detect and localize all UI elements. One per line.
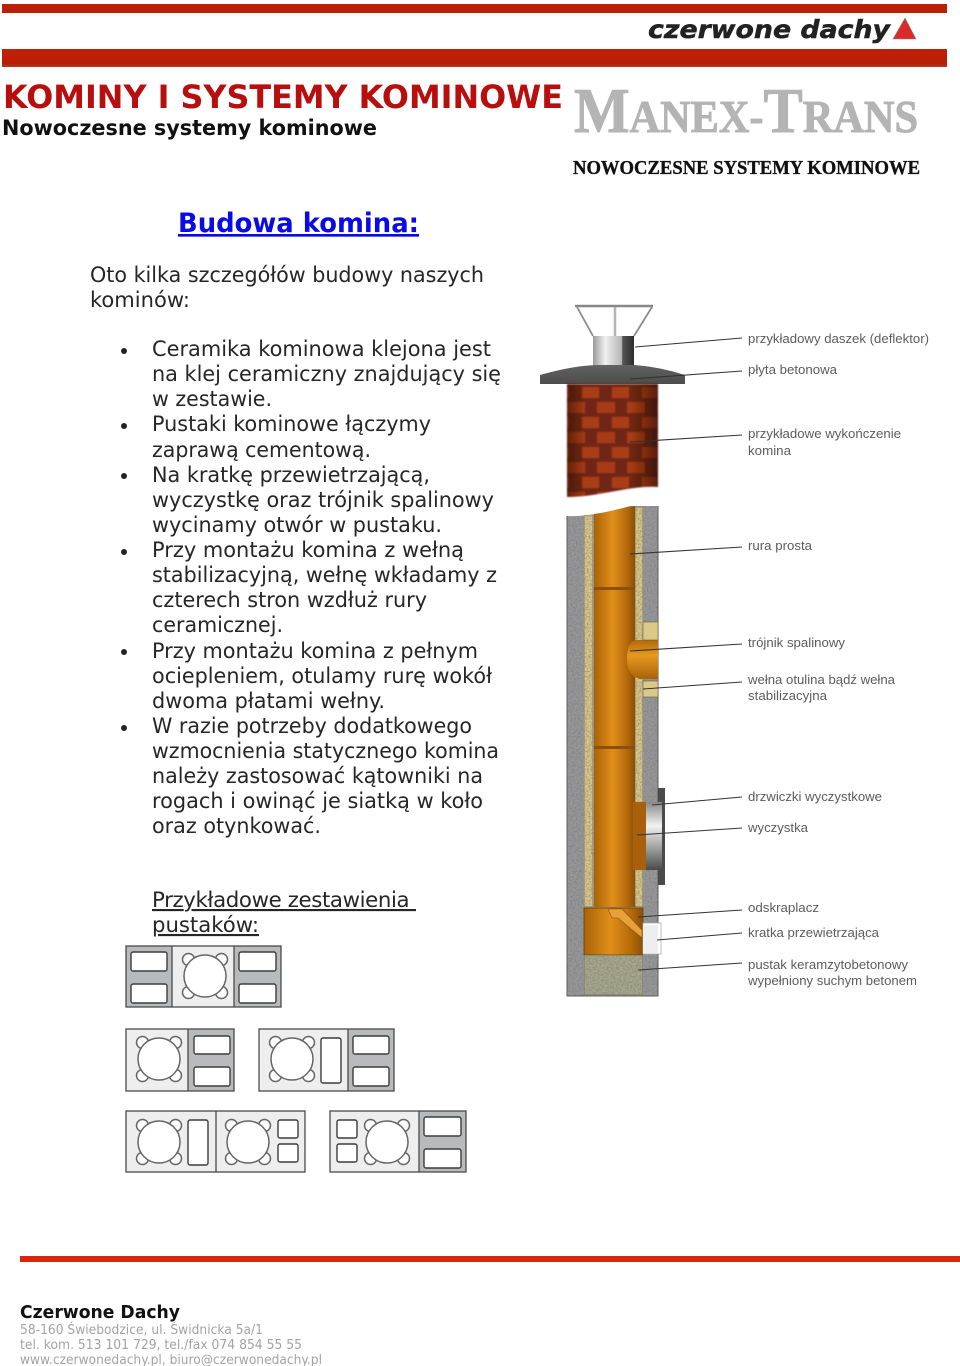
part labels: wypełniony suchym betonem [747,973,917,988]
bullet list: Pustaki kominowe łączymy [152,412,431,437]
chimney diagram [540,306,929,996]
bullet list: na klej ceramiczny znajdujący się [152,362,501,387]
part labels: rura prosta [748,538,813,553]
footer contact [20,1302,322,1366]
intro text: Oto kilka szczegółów budowy naszych [90,263,484,288]
bullet list: rogach i owinąć je siatką w koło [152,789,483,814]
bullet list: dwoma płatami wełny. [152,689,385,714]
bullet list [121,337,501,839]
title: KOMINY I SYSTEMY KOMINOWE [3,78,563,116]
tee branch [627,640,658,679]
part labels: kratka przewietrzająca [748,925,880,940]
footer bar [20,1256,960,1262]
part labels [747,331,929,988]
part labels: komina [748,443,792,458]
logo: Manex-Trans: MANEX-TRANS [574,75,918,146]
vent grille [643,923,661,954]
bullet list: ociepleniem, otulamy rurę wokół [152,664,493,689]
leader lines [630,338,742,970]
outer concrete wall [567,506,658,996]
second red bar [2,49,947,67]
bullet list: stabilizacyjną, wełnę wkładamy z [152,563,497,588]
part labels: trójnik spalinowy [748,635,846,650]
bullet list: należy zastosować kątowniki na [152,764,483,789]
block set 4 [126,1111,305,1172]
part labels: wełna otulina bądź wełna [747,672,896,687]
condensate trap [584,908,643,955]
heading: example block sets: Przykładowe zestawienia [152,888,416,913]
bullet list: zaprawą cementową. [152,438,371,463]
cleanout door [658,788,665,885]
part labels: pustak keramzytobetonowy [748,957,908,972]
bullet list: czterech stron wzdłuż rury [152,588,427,613]
insulation right [635,507,643,907]
block set 2 [126,1029,234,1091]
deflector cap [575,306,653,366]
top red bar [2,4,947,13]
wool around tee [643,622,658,640]
part labels: drzwiczki wyczystkowe [748,789,882,804]
logo: Manex-Trans [573,75,920,179]
bullet list: wzmocnienia statycznego komina [152,739,499,764]
block set 1 [126,946,281,1007]
part labels: wyczystka [747,820,809,835]
cleanout [633,802,646,870]
bullet list: wyczystkę oraz trójnik spalinowy [152,488,494,513]
bullet list: Przy montażu komina z pełnym [152,639,478,664]
logo: czerwone dachy: czerwone dachy [648,15,892,44]
footer contact: tel. kom. 513 101 729, tel./fax 074 854 55 55 [20,1338,302,1353]
bullet list: Na kratkę przewietrzającą, [152,463,430,488]
intro text [90,263,484,313]
heading: example block sets [152,888,416,938]
bullet list: Ceramika kominowa klejona jest [152,337,491,362]
chimney shaft [567,506,665,996]
heading: example block sets: pustaków: [152,913,259,938]
bullet list: w zestawie. [152,387,272,412]
part labels: przykładowe wykończenie [748,426,901,441]
bullet list: W razie potrzeby dodatkowego [152,714,472,739]
heading: Budowa komina: Budowa komina: [178,208,419,239]
bullet list: Przy montażu komina z wełną [152,538,464,563]
part labels: odskraplacz [748,900,819,915]
footer contact: 58-160 Świebodzice, ul. Świdnicka 5a/1 [20,1320,263,1338]
block set 5 [330,1111,466,1172]
flue pipe [594,506,635,907]
intro text: kominów: [90,288,190,313]
bullet list: wycinamy otwór w pustaku. [152,513,442,538]
block set 3 [259,1029,394,1091]
bullet list: ceramicznej. [152,613,283,638]
footer contact: Czerwone Dachy [20,1302,180,1323]
insulation left [584,515,593,907]
part labels: płyta betonowa [748,362,838,377]
icon: red roof triangle [893,18,916,39]
bullet markers [121,348,127,731]
part labels: przykładowy daszek (deflektor) [748,331,929,346]
concrete slab [540,365,685,384]
concrete base [584,955,643,995]
brick finish [567,384,658,497]
pipe joints [594,587,635,590]
part labels: stabilizacyjna [748,688,828,703]
bullet list: oraz otynkować. [152,814,321,839]
logo tagline: NOWOCZESNE SYSTEMY KOMINOWE [573,158,920,179]
subtitle: Nowoczesne systemy kominowe [2,116,377,141]
